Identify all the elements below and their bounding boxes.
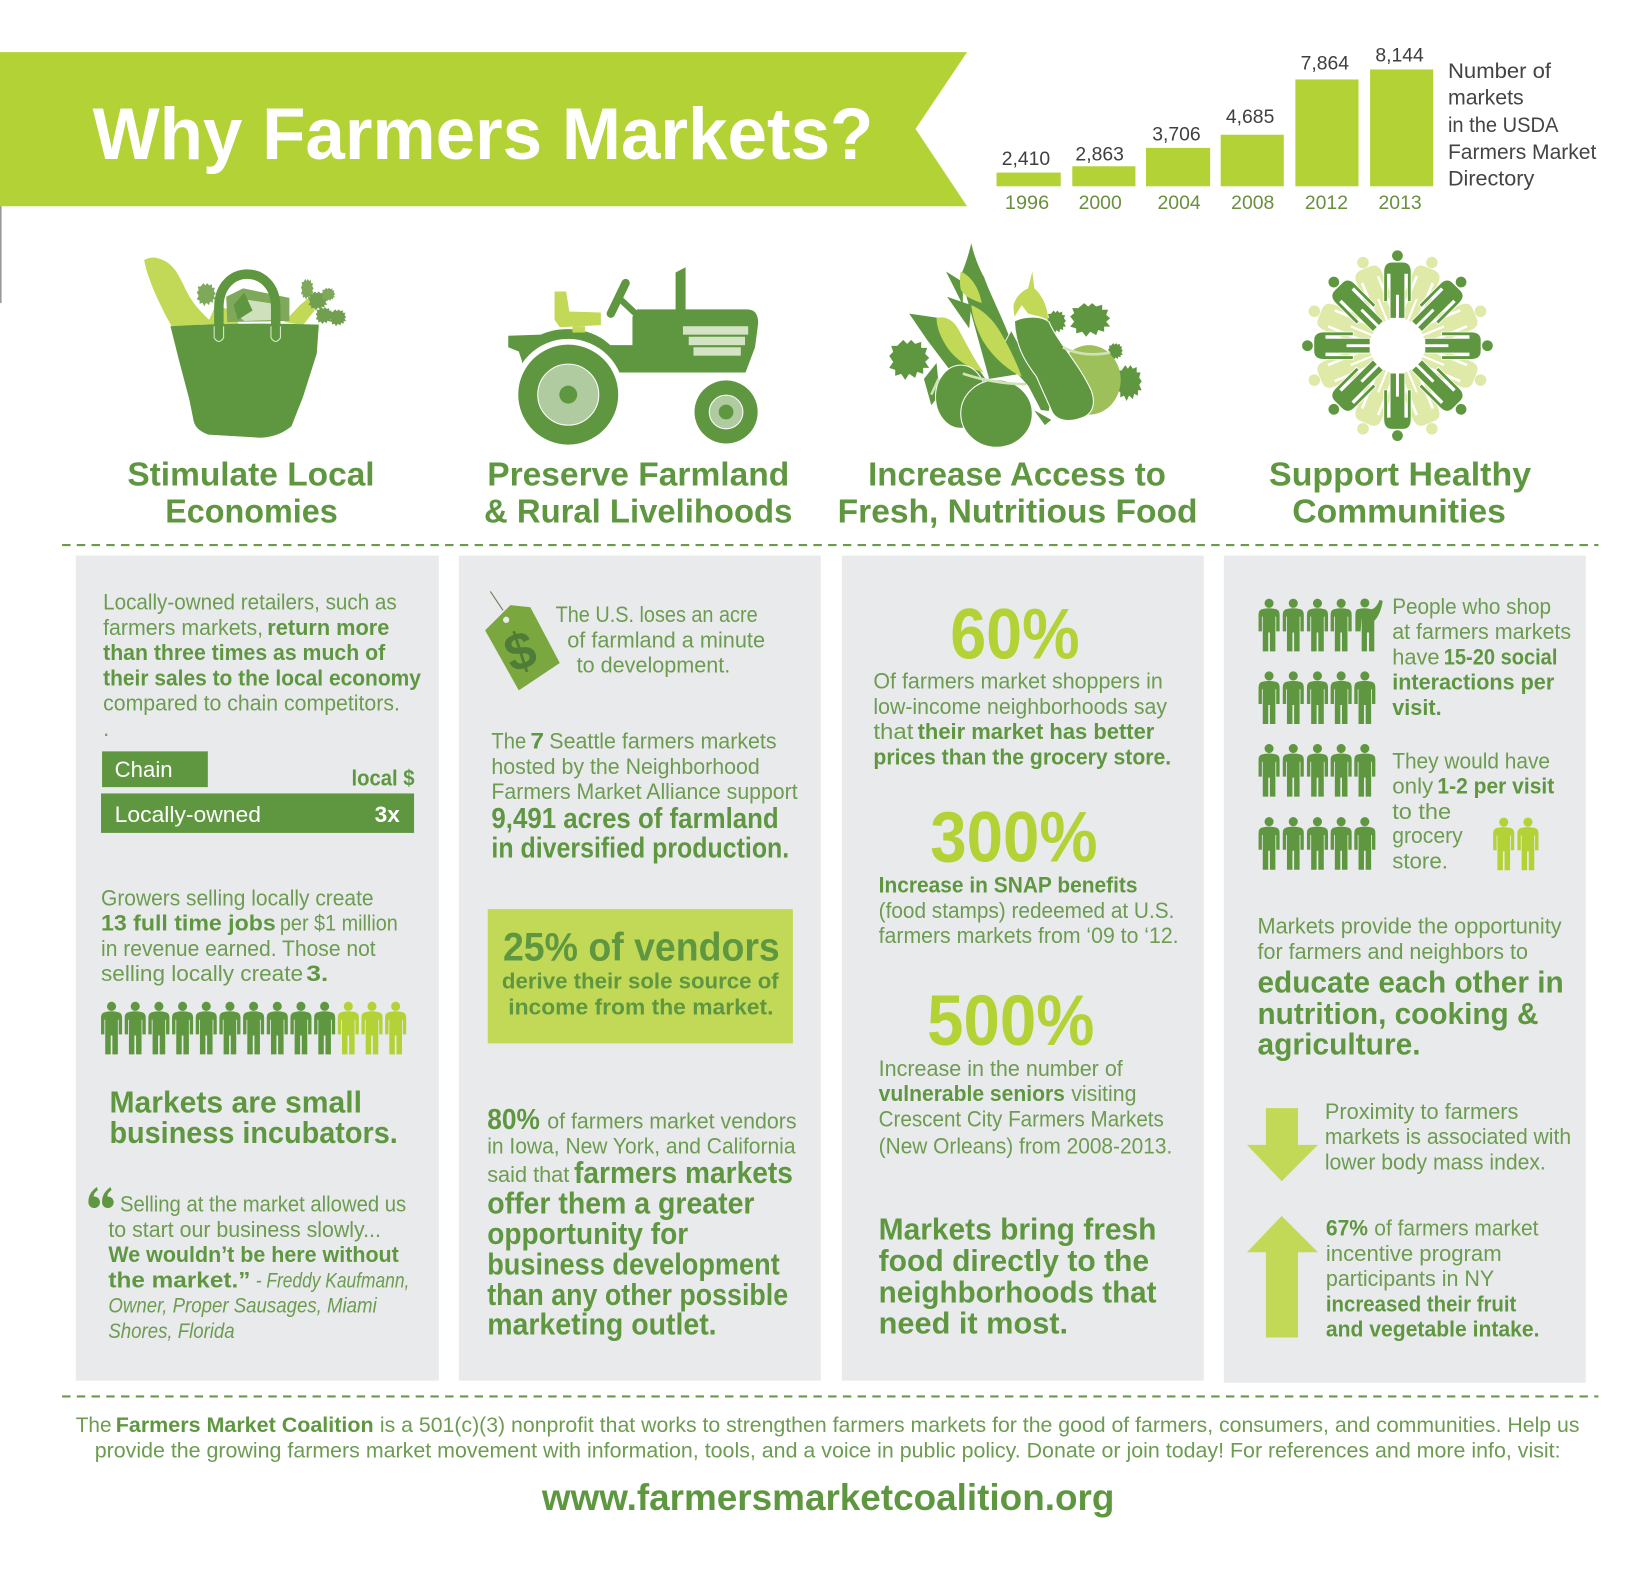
text: body mass index: lower body mass index. [1325,1149,1546,1174]
text: 15-20 social interactions [1392,594,1571,720]
panel: farmland [459,556,821,1381]
stat: 300%: (food stamps) redeemed at U.S. [879,898,1174,923]
heading: stimulate local economies: Economies [165,493,338,530]
bar chart: number of markets: 2,410 [1002,149,1050,170]
stat: 60% [873,595,1171,769]
text: Seattle farmland: Farmers Market Alliance support [491,779,798,804]
bar chart: number of markets: 2000 [1079,193,1122,214]
website url: www.farmersmarketcoalition.org [541,1477,1114,1518]
text: 15-20 social interactions: at farmers markets [1392,619,1571,644]
text: 80% of vendors: in Iowa, New York, and California [487,1134,796,1159]
text: return more: . [103,716,109,741]
stat: 300%: Increase in SNAP benefits [879,873,1138,898]
icon: tractor [508,267,758,450]
quote text: Shores, Florida [108,1320,235,1343]
stat: 300% [879,797,1179,948]
text: acre a minute: of farmland a minute [567,627,765,652]
stat: 500%: visiting [1071,1081,1136,1106]
text: return more [103,590,422,741]
quote text: Owner, Proper Sausages, Miami [108,1295,378,1318]
bar chart: number of markets: 2008 [1231,193,1274,214]
text: body mass index: Proximity to farmers [1325,1099,1518,1124]
text: return more: Locally-owned retailers, such as [103,590,397,615]
text: educate each other [1257,914,1564,1061]
heading: increase access: Increase Access to [868,457,1166,494]
bar chart: number of markets: 2013 [1379,193,1422,214]
text: 80% of vendors: said that [487,1162,569,1187]
text: fruit and vegetable intake [1326,1216,1540,1342]
icon: grocery bag [144,258,346,438]
text: 1-2 per visit: to the [1392,799,1451,824]
text: Seattle farmland: Seattle farmers markets [549,729,777,754]
text: educate each other: educate each other in [1257,965,1564,999]
text: 80% of vendors: 80% [487,1104,540,1136]
bar chart: number of markets: 4,685 [1226,107,1274,128]
stat: 500%: (New Orleans) from 2008-2013. [879,1134,1172,1159]
stat: 300%: 300% [930,797,1098,877]
footer text [76,1412,1579,1462]
callout: small business incubators: Markets are small [109,1085,362,1119]
callout: fresh food [879,1213,1156,1340]
footer text: provide the growing farmers market movement with information, tools, and a voice in public policy. Donate or join today! For references and more info, visit: [95,1437,1561,1462]
text: body mass index: markets is associated with [1325,1124,1571,1149]
bar chart: number of markets: 7,864 [1301,53,1349,74]
title: Why Farmers Markets? [93,92,873,175]
footer text: is a 501(c)(3) nonprofit that works to strengthen farmers markets for the good of farmers, consumers, and communities. Help us [380,1412,1579,1437]
text: 80% of vendors: of farmers market vendors [547,1108,797,1133]
text: acre a minute: to development. [577,653,730,678]
bars: chain vs locally-owned [101,751,415,833]
text: 80% of vendors: offer them a greater [487,1186,755,1220]
bars: chain vs locally-owned: 3x [375,802,401,827]
text: 1-2 per visit: only [1392,774,1433,799]
heading: support healthy communities: Communities [1292,493,1506,530]
text: 1-2 per visit: store. [1392,848,1448,873]
text: 80% of vendors: farmers markets [574,1156,793,1190]
icon: price tag [485,591,560,690]
text: full time jobs: per $1 million [280,911,398,936]
callout: small business incubators: business incubators. [109,1116,398,1150]
text: fruit and vegetable intake: increased their fruit [1326,1291,1517,1316]
heading: stimulate local economies: Stimulate Local [127,457,375,494]
text: fruit and vegetable intake: and vegetable intake. [1326,1317,1540,1342]
text: Seattle farmland: 7 [530,729,544,754]
callout: 25% of vendors: 25% of vendors [503,926,780,970]
stat: 60%: 60% [950,595,1080,675]
chart caption: Directory [1448,168,1535,191]
callout: 25% of vendors [488,909,793,1043]
text: Seattle farmland: in diversified production. [491,833,789,865]
text: 1-2 per visit [1392,749,1555,873]
pictogram: grocery interactions [1259,744,1538,870]
text: educate each other: Markets provide the opportunity [1257,914,1562,939]
text: fruit and vegetable intake: incentive program [1326,1241,1502,1266]
bar chart: number of markets: 2,863 [1075,144,1124,165]
text: return more: return more [267,615,389,640]
text: full time jobs [101,885,398,986]
quote text: the market.” [108,1267,250,1292]
icon: fresh vegetables [889,243,1142,447]
text: full time jobs: in revenue earned. Those not [101,936,376,961]
text: fruit and vegetable intake: 67% [1326,1216,1368,1241]
arrow: up [1247,1216,1318,1337]
heading: preserve farmland: & Rural Livelihoods [484,493,792,530]
bar chart: number of markets: 3,706 [1152,124,1201,145]
heading: preserve farmland [484,457,792,530]
callout: small business incubators [109,1085,398,1150]
text: educate each other: nutrition, cooking & [1257,997,1538,1031]
bars: chain vs locally-owned: Chain [115,757,173,782]
text: 80% of vendors: opportunity for [487,1217,688,1251]
callout: fresh food: food directly to the [879,1244,1149,1278]
bar chart: number of markets: 8,144 [1375,46,1424,67]
chart caption: markets [1448,87,1524,110]
text: full time jobs: selling locally create [101,961,303,986]
text: 15-20 social interactions: visit. [1392,695,1442,720]
text: 1-2 per visit: 1-2 per visit [1437,774,1555,799]
text: return more: than three times as much of [103,640,386,665]
quote text: to start our business slowly... [108,1217,381,1242]
text: 80% of vendors [487,1104,797,1341]
text: 80% of vendors: business development [487,1247,780,1281]
heading: support healthy communities [1269,457,1531,530]
text: full time jobs: 3. [306,961,328,986]
stat: 500%: 500% [927,981,1094,1061]
stat: 60%: their market has better [918,719,1155,744]
icon: price tag: $ [497,619,543,684]
bars: chain vs locally-owned: Locally-owned [115,802,261,827]
chart caption: in the USDA [1448,114,1558,137]
text: fruit and vegetable intake: participants in NY [1326,1266,1495,1291]
stat: 500%: vulnerable seniors [879,1081,1065,1106]
icon: ring of people [1302,250,1493,441]
text: 15-20 social interactions: 15-20 social [1444,644,1557,669]
callout: 25% of vendors: income from the market. [508,995,773,1020]
text: 15-20 social interactions: interactions per [1392,670,1555,695]
panel: fresh food access [842,556,1204,1381]
heading: preserve farmland: Preserve Farmland [487,457,789,494]
text: full time jobs: Growers selling locally create [101,885,374,910]
heading: increase access [838,457,1198,530]
heading: stimulate local economies [127,457,375,530]
text: educate each other: for farmers and neighbors to [1257,939,1528,964]
bar chart: number of markets: 2012 [1305,193,1348,214]
text: Seattle farmland [491,729,798,865]
quote text: Selling at the market allowed us [120,1192,406,1217]
footer text: Farmers Market Coalition [116,1412,374,1437]
icon: quotation mark [88,1187,114,1208]
text: Seattle farmland: hosted by the Neighborhood [491,754,760,779]
arrow: down [1247,1108,1318,1181]
chart caption: Farmers Market [1448,141,1596,164]
text: return more: compared to chain competitors. [103,691,400,716]
panel: healthy communities [1224,556,1586,1383]
text: acre a minute: The U.S. loses an acre [556,602,758,627]
text: Seattle farmland: 9,491 acres of farmland [491,803,779,835]
callout: fresh food: neighborhoods that [879,1276,1156,1310]
text: 80% of vendors: marketing outlet. [487,1307,717,1341]
text: 1-2 per visit: grocery [1392,823,1463,848]
stat: 300%: farmers markets from ‘09 to ‘12. [879,923,1179,948]
text: return more: their sales to the local economy [103,665,422,690]
chart caption [1448,60,1596,191]
stat: 500%: Increase in the number of [879,1056,1124,1081]
bars: chain vs locally-owned: local $ [351,765,415,790]
bar chart: number of markets: 1996 [1005,193,1049,214]
footer text: The [76,1412,112,1437]
stat: 500%: Crescent City Farmers Markets [879,1106,1164,1131]
chart caption: Number of [1448,60,1551,83]
stat: 60%: that [873,719,913,744]
text: acre a minute [556,602,765,678]
callout: fresh food: need it most. [879,1306,1068,1340]
stat: 60%: Of farmers market shoppers in [873,669,1163,694]
text: 15-20 social interactions: People who shop [1392,594,1551,619]
heading: increase access: Fresh, Nutritious Food [838,493,1198,530]
text: full time jobs: 13 full time jobs [101,911,276,936]
stat: 60%: prices than the grocery store. [873,744,1171,769]
text: 80% of vendors: than any other possible [487,1278,788,1312]
text: body mass index [1325,1099,1571,1174]
text: 15-20 social interactions: have [1392,644,1440,669]
text: return more: farmers markets, [103,615,263,640]
text: fruit and vegetable intake: of farmers market [1374,1216,1538,1241]
quote text [108,1192,409,1343]
bar chart: number of markets: 2004 [1158,193,1201,214]
bar chart: number of markets [997,46,1433,214]
panel: local economies [76,556,439,1381]
stat: 60%: low-income neighborhoods say [873,694,1167,719]
title banner [0,52,967,206]
callout: fresh food: Markets bring fresh [879,1213,1156,1247]
text: educate each other: agriculture. [1257,1027,1421,1061]
quote text: We wouldn’t be here without [108,1242,399,1267]
pictogram: social interactions at markets [1259,598,1383,724]
text: 1-2 per visit: They would have [1392,749,1550,774]
quote text: - Freddy Kaufmann, [256,1269,409,1292]
callout: 25% of vendors: derive their sole source of [502,968,779,993]
stat: 500% [879,981,1172,1159]
pictogram: thirteen jobs [101,1002,406,1054]
heading: support healthy communities: Support Healthy [1269,457,1531,494]
text: Seattle farmland: The [491,729,526,754]
